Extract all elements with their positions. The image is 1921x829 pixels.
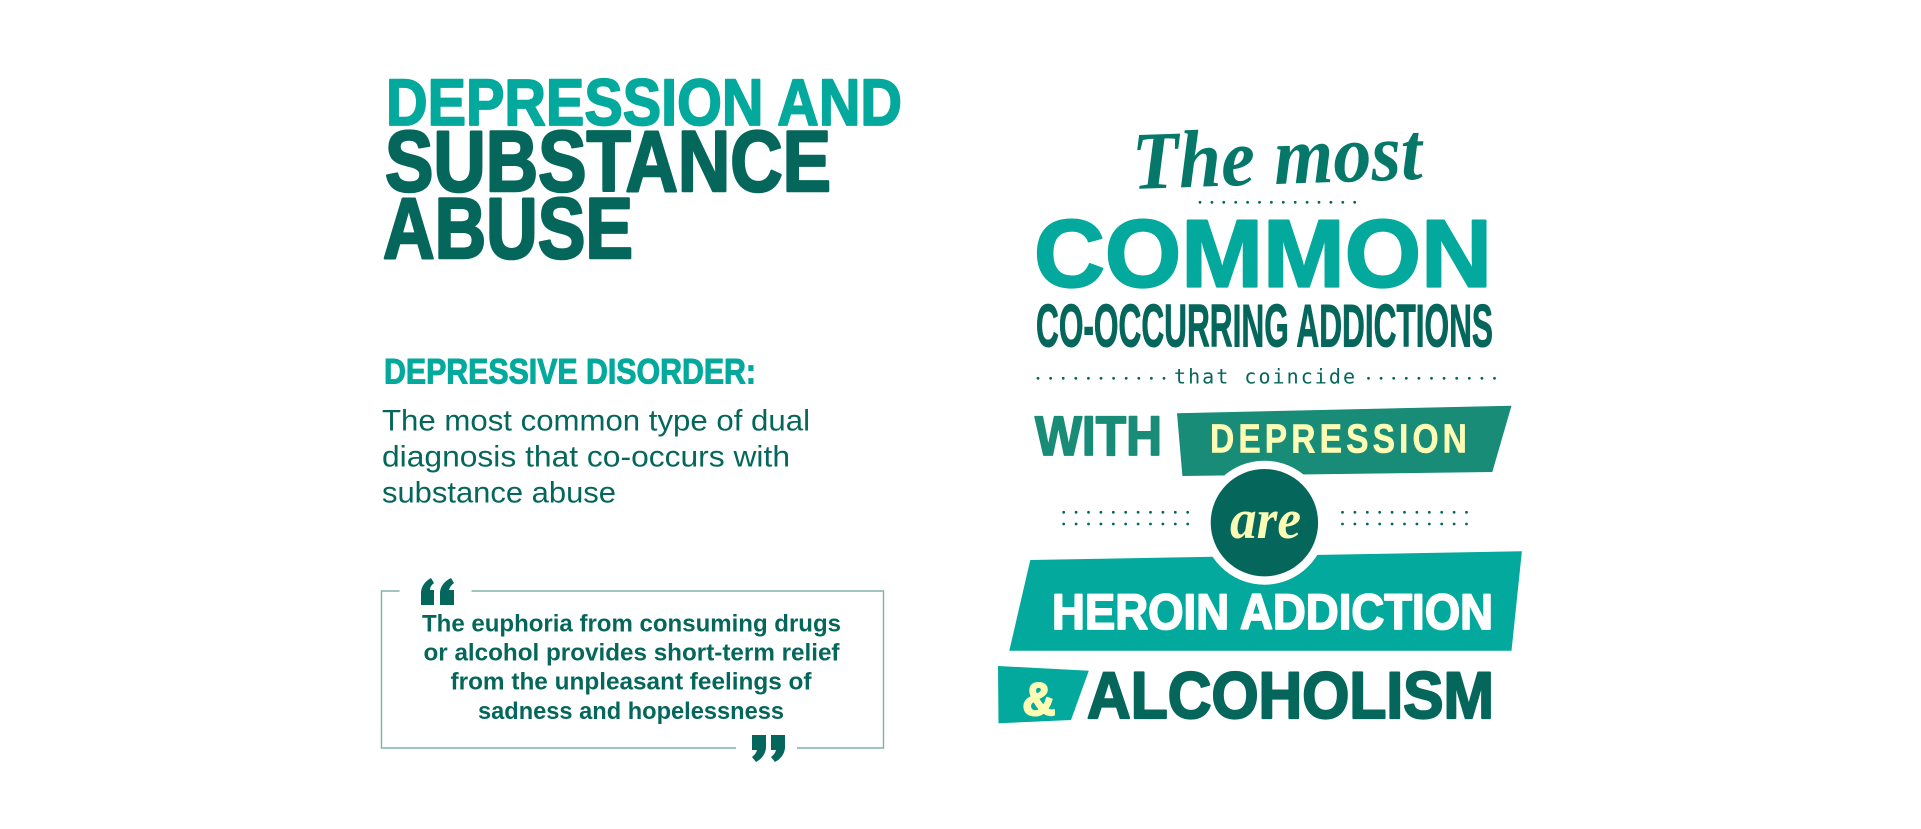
heading: common: COMMON xyxy=(1034,200,1492,308)
text block: definition: The most common type of dual xyxy=(382,405,810,438)
circle badge: are: are xyxy=(1230,489,1301,551)
text: that coincide: that coincide xyxy=(1174,364,1355,388)
text block: definition xyxy=(382,405,810,509)
icon: opening quotation mark xyxy=(421,578,454,605)
title: ABUSE xyxy=(383,181,633,277)
dotted line left of that coincide xyxy=(1038,377,1165,380)
banner: heroin addiction xyxy=(1009,551,1522,651)
dotted line right of that coincide xyxy=(1368,377,1496,380)
dotted rows left of circle xyxy=(1064,512,1189,524)
quote text: or alcohol provides short-term relief xyxy=(424,640,841,667)
right panel: typographic statement xyxy=(998,106,1522,732)
title: SUBSTANCE xyxy=(385,114,831,210)
script heading: the most: The most xyxy=(1130,106,1425,207)
heading: co-occurring addictions: CO-OCCURRING ADDICTIONS xyxy=(1036,292,1493,360)
heading: depressive disorder: DEPRESSIVE DISORDER: xyxy=(384,352,756,392)
banner: depression: DEPRESSION xyxy=(1210,416,1471,462)
quote frame xyxy=(382,591,884,748)
circle badge: are xyxy=(1202,461,1326,585)
banner: heroin addiction: HEROIN ADDICTION xyxy=(1052,584,1493,640)
quote text: from the unpleasant feelings of xyxy=(450,668,813,695)
title: DEPRESSION AND xyxy=(386,65,902,139)
quote panel xyxy=(382,578,884,762)
ampersand tag: & xyxy=(1022,673,1055,725)
banner: depression xyxy=(1177,406,1512,476)
text block: definition: diagnosis that co-occurs with xyxy=(382,441,790,474)
dotted line under script heading xyxy=(1200,201,1356,204)
ampersand tag xyxy=(998,666,1089,725)
quote text: sadness and hopelessness xyxy=(478,698,784,725)
title xyxy=(383,65,902,277)
quote text xyxy=(422,611,841,725)
text: with: WITH xyxy=(1035,404,1162,467)
icon: closing quotation mark xyxy=(752,735,785,762)
left panel: definition and quote xyxy=(382,65,902,762)
heading: alcoholism: ALCOHOLISM xyxy=(1087,658,1494,732)
text block: definition: substance abuse xyxy=(382,476,616,509)
dotted rows right of circle xyxy=(1342,512,1468,524)
quote text: The euphoria from consuming drugs xyxy=(422,611,841,638)
